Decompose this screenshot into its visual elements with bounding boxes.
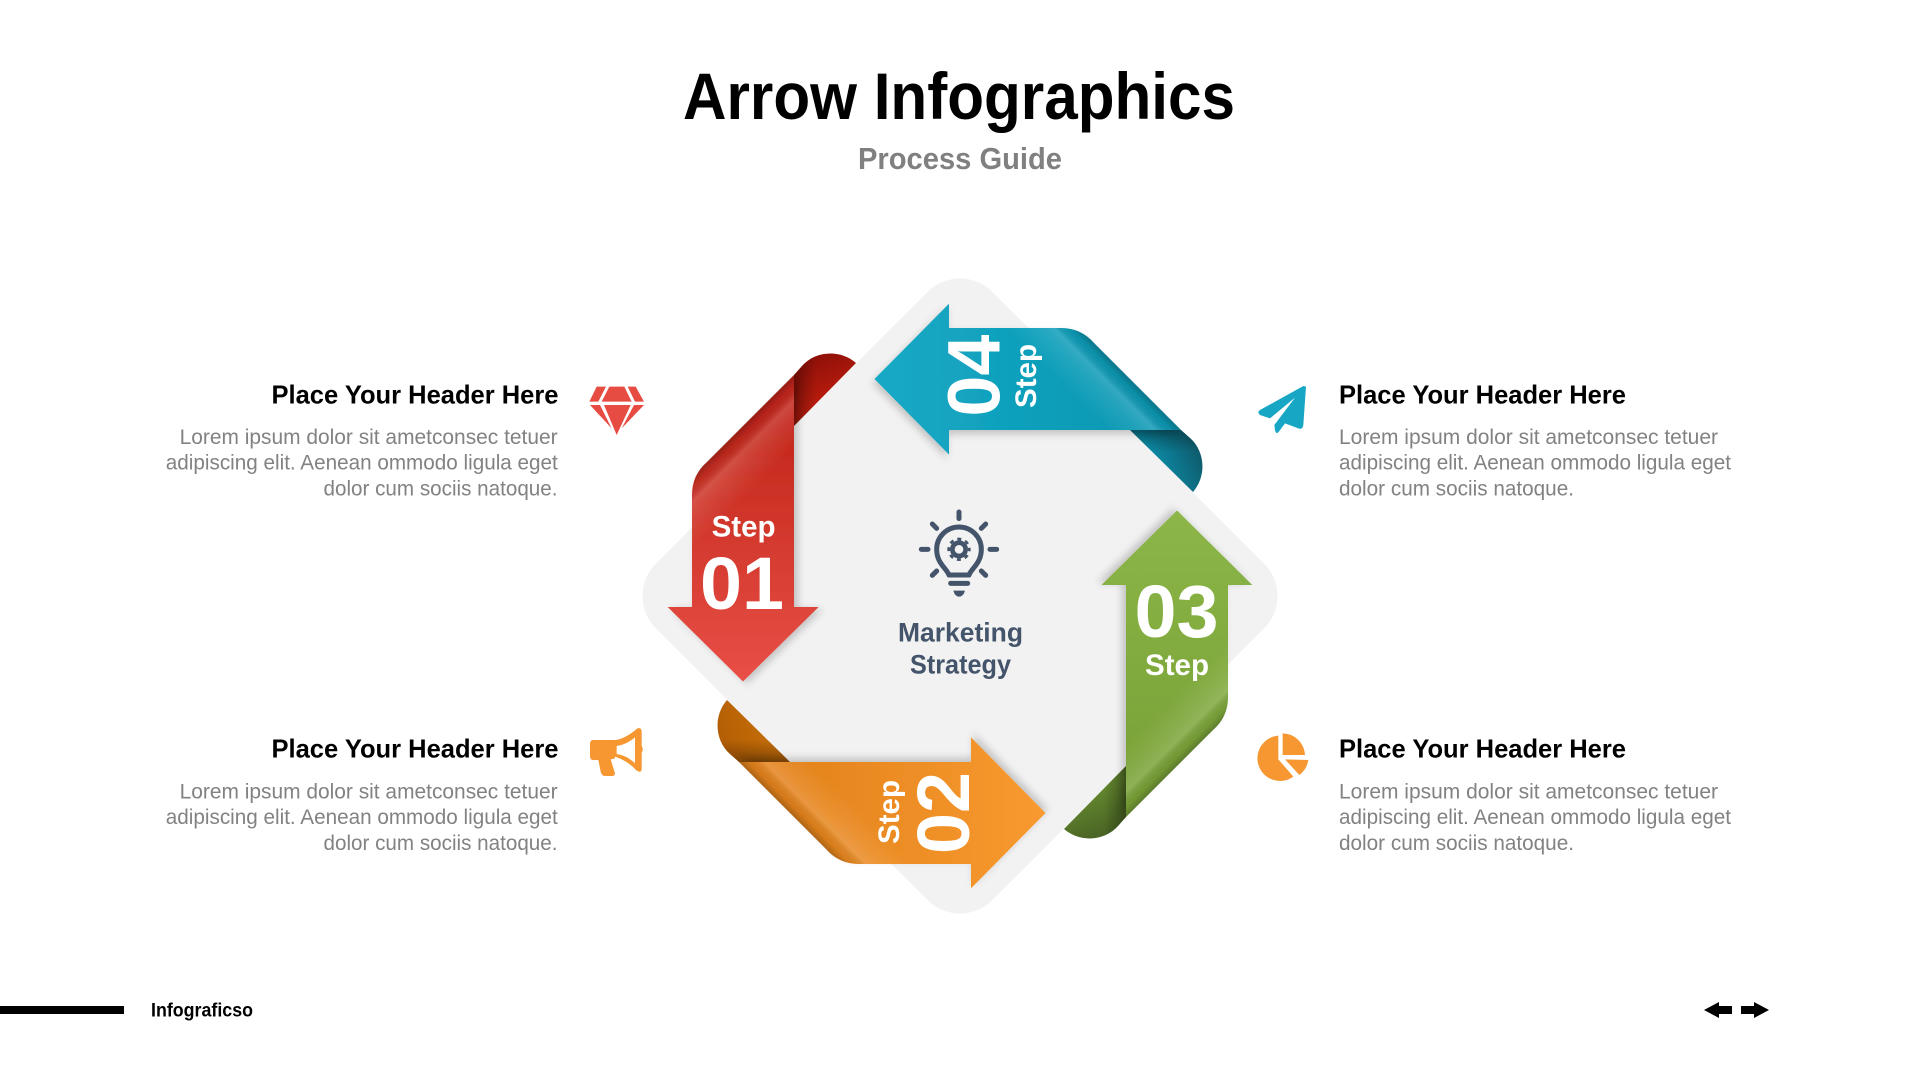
icon: light bulb with gear [921,512,997,597]
label: step 04: Step [1010,344,1043,408]
icon: previous arrow [1704,1002,1732,1018]
red fold highlight [692,375,794,607]
red arrow body [668,375,819,682]
arrow: step 04 blue [874,304,1202,492]
label: step 04: 04 [932,335,1016,417]
text block: bottom left: Place Your Header Here [272,733,558,763]
title: Arrow Infographics [683,59,1235,133]
center label: Strategy [910,650,1011,680]
text block: bottom left: Lorem ipsum dolor sit ametconsec tetuer [180,780,558,804]
text block: bottom right: dolor cum sociis natoque. [1339,832,1574,855]
center label: Marketing [898,618,1023,648]
text block: bottom left: adipiscing elit. Aenean ommodo ligula eget [166,806,558,829]
icon: pie chart [1257,733,1308,781]
center label [898,618,1023,680]
icon: gem [589,387,644,435]
green arrow body [1101,510,1252,817]
icon: paper plane [1258,386,1306,433]
blue fold [1130,430,1202,492]
label: step 03: 03 [1134,570,1218,653]
label: step 02: 02 [902,772,985,854]
blue fold highlight [949,328,1181,430]
text block: top right [1339,379,1731,500]
label: step 01: 01 [700,542,784,625]
label: step 01: Step [712,510,776,544]
text block: bottom left: dolor cum sociis natoque. [324,832,558,855]
text block: top right: dolor cum sociis natoque. [1339,477,1574,500]
blue arrow body [874,304,1181,455]
arrow: step 03 green [1064,510,1252,838]
text block: bottom right: adipiscing elit. Aenean ommodo ligula eget [1339,806,1731,829]
text block: top left: dolor cum sociis natoque. [324,477,558,500]
text block: top left [166,379,559,500]
label: step 03: Step [1145,649,1209,682]
text block: bottom right: Place Your Header Here [1339,733,1626,763]
icon: megaphone [590,728,643,776]
text block: bottom left [166,733,559,855]
text block: top left: Place Your Header Here [272,379,558,409]
green fold highlight [1126,585,1228,817]
red fold [794,354,856,426]
text block: top left: Lorem ipsum dolor sit ametconsec tetuer [180,426,558,449]
green fold [1064,766,1126,838]
label: step 02: Step [873,780,906,844]
subtitle: Process Guide [858,141,1062,176]
icon: next arrow [1741,1002,1769,1018]
central grey diamond panel [623,259,1297,933]
text block: top right: Place Your Header Here [1339,379,1626,409]
text block: top right: adipiscing elit. Aenean ommodo ligula eget [1339,452,1731,475]
text block: bottom right: Lorem ipsum dolor sit ametconsec tetuer [1339,780,1718,804]
text block: top right: Lorem ipsum dolor sit ametconsec tetuer [1339,426,1718,449]
arrow: step 02 orange [718,700,1046,888]
text block: bottom right [1339,733,1731,855]
arrow: step 01 red [668,354,856,682]
orange arrow body [739,737,1046,888]
footer bar [0,1006,124,1014]
orange fold highlight [739,762,971,864]
orange fold [718,700,790,762]
footer brand: Infograficso [151,1001,253,1022]
text block: top left: adipiscing elit. Aenean ommodo ligula eget [166,452,558,475]
